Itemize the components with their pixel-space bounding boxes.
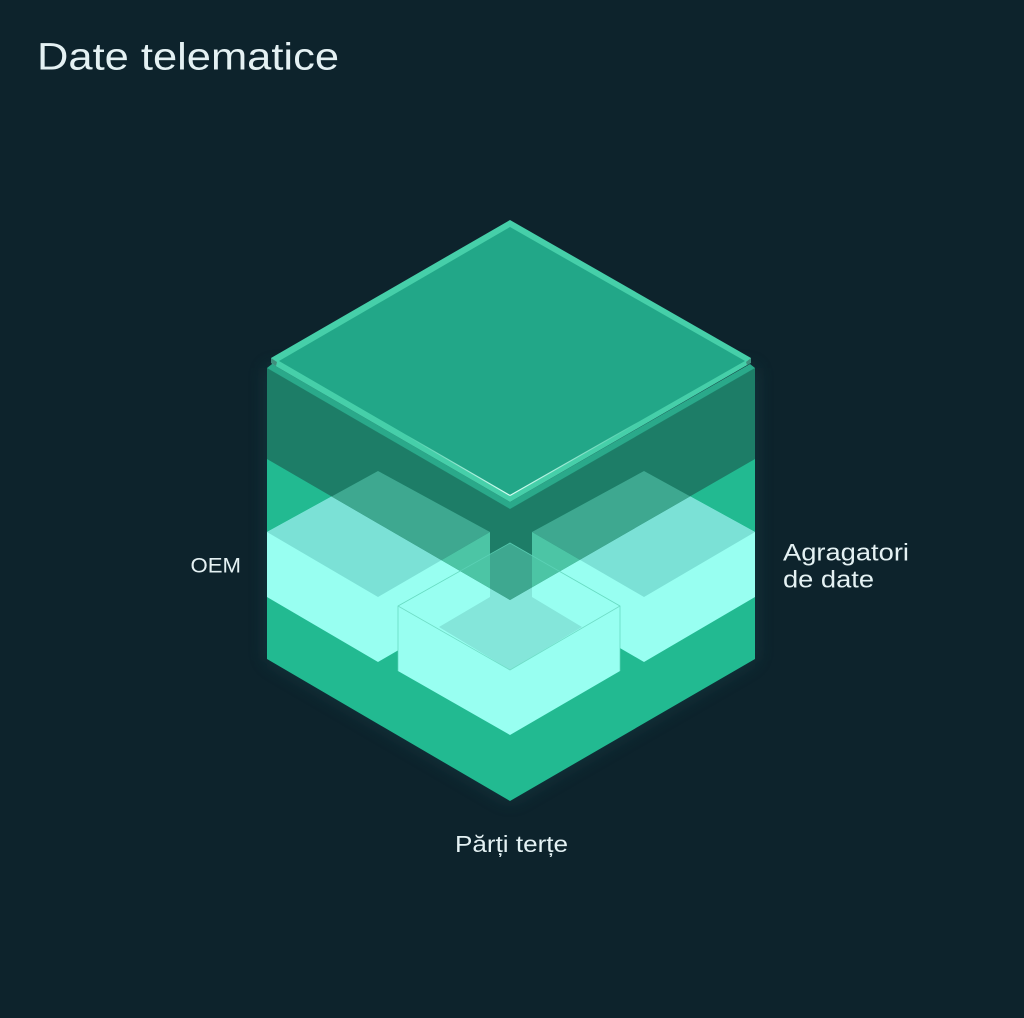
lid rim <box>271 220 751 502</box>
gap column seen through band <box>490 544 532 600</box>
aggregators block faces <box>532 471 755 662</box>
soft glow behind cube <box>267 368 755 801</box>
label: OEM: OEM <box>190 554 241 578</box>
blocks seen through band <box>332 471 690 600</box>
block: third parties <box>398 543 620 735</box>
OEM block top <box>267 471 490 597</box>
aggregators top seen through band <box>532 471 690 560</box>
isometric cube diagram <box>267 220 755 801</box>
label: Agragatori de date: Agragatori <box>783 540 909 566</box>
dark translucent band <box>267 368 755 600</box>
lid top face <box>279 227 745 495</box>
label: Agragatori de date <box>783 540 909 594</box>
OEM side seen through band <box>442 532 490 588</box>
block: data aggregators <box>532 471 755 662</box>
lid <box>267 220 755 509</box>
lid highlight right <box>510 361 745 496</box>
lid corner right <box>746 358 751 365</box>
aggregators block top <box>532 471 755 597</box>
cube base <box>267 368 755 801</box>
third parties top shade <box>439 580 582 670</box>
aggregators side seen through band <box>532 532 580 588</box>
third parties front edges <box>398 606 620 670</box>
OEM top seen through band <box>332 471 490 560</box>
lid under edge <box>267 364 755 509</box>
title: Date telematice <box>37 36 339 78</box>
lid highlight left <box>279 361 510 496</box>
OEM block faces <box>267 471 490 662</box>
label: Agragatori de date: de date <box>783 566 874 594</box>
label: Părți terțe: Părți terțe <box>455 831 568 857</box>
third parties block outline <box>398 543 620 671</box>
block: OEM <box>267 471 490 662</box>
lid corner left <box>271 358 277 366</box>
third parties block body <box>398 543 620 735</box>
